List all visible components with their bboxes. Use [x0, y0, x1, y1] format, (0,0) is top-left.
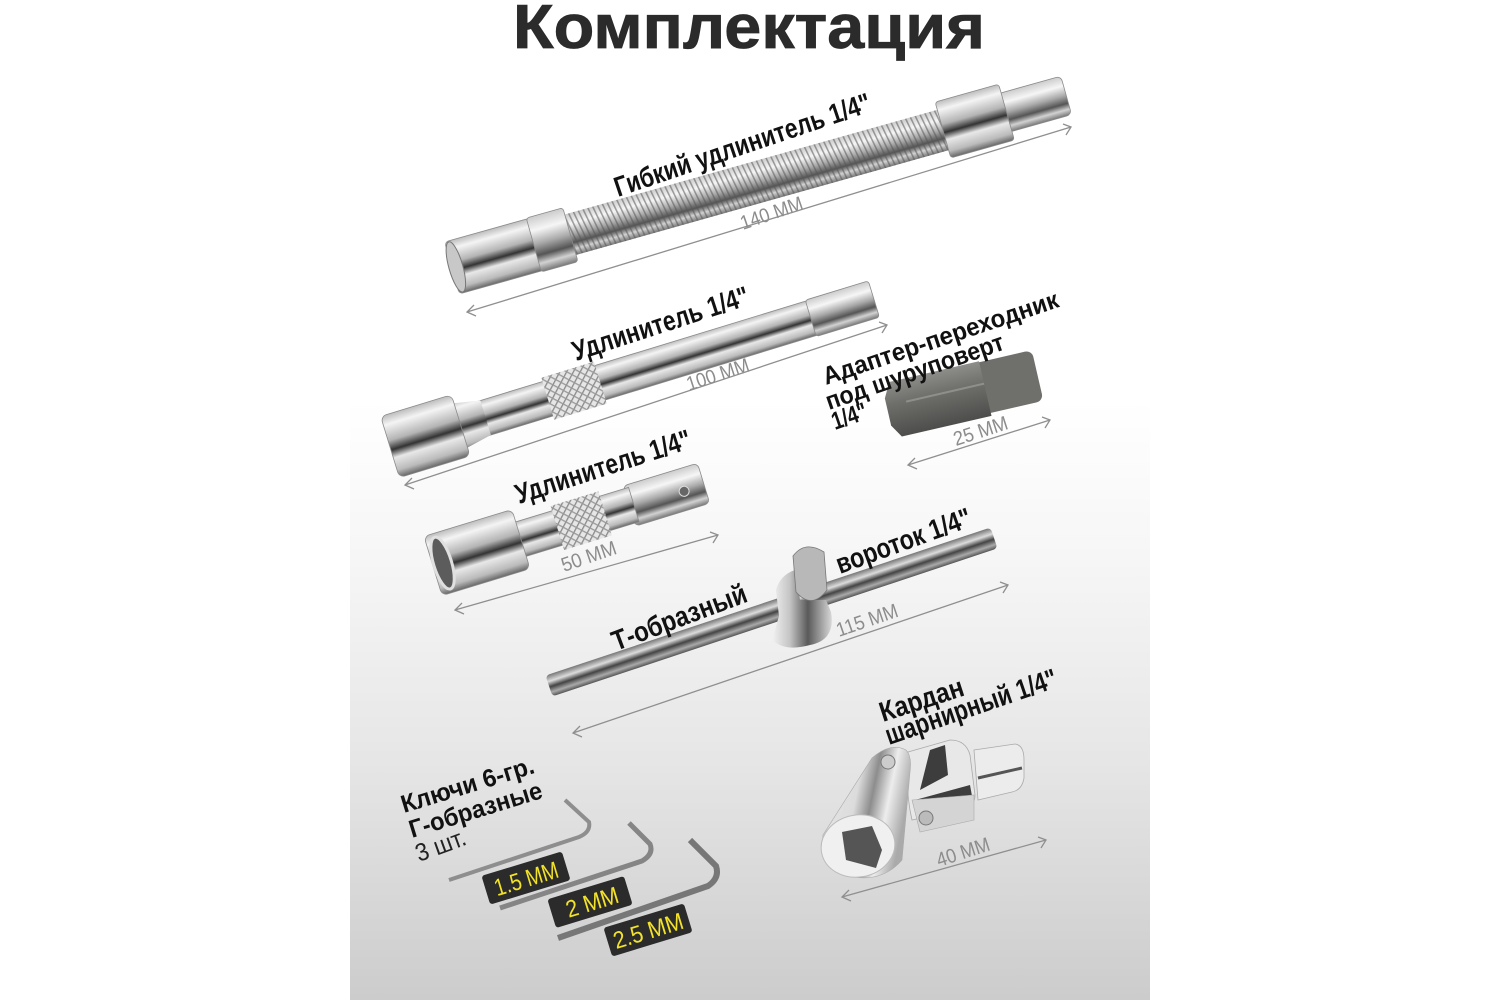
label line 3: 1/4": [828, 397, 871, 436]
socket face: [816, 809, 900, 883]
upper pin: [881, 755, 895, 769]
arrow: 50 mm: [455, 532, 718, 614]
yoke: [907, 740, 975, 820]
label: T-shaped: Т-образный: [607, 578, 751, 657]
item: screwdriver adapter 25 mm: [819, 286, 1063, 469]
arrow: 140 mm: [467, 124, 1071, 316]
dimension: 100 mm: 100 ММ: [684, 355, 752, 396]
tool: universal joint: [816, 740, 1024, 883]
sliding collar: [772, 570, 832, 648]
tool: extension 100 mm: [381, 268, 883, 478]
rod: [546, 528, 997, 696]
label line 1: Кардан: [875, 671, 968, 728]
label line 3: 3 шт.: [411, 824, 470, 868]
dimension: 115 mm: 115 ММ: [833, 600, 901, 642]
yoke shadow: [915, 745, 972, 810]
item: flexible extension 140 mm: [441, 67, 1074, 316]
pin: [919, 811, 933, 825]
label line 2: шарнирный 1/4": [881, 663, 1061, 751]
square socket opening: [842, 826, 882, 868]
size tag 1.5 mm: 1.5 ММ: [491, 857, 562, 902]
label line 2: под шуруповерт: [822, 328, 1008, 416]
label: extension 50 mm: Удлинитель 1/4": [511, 424, 695, 510]
background panel: [350, 200, 1150, 1000]
arrow: 100 mm: [405, 322, 887, 489]
size tag 2 mm: [547, 876, 633, 928]
size tag 2.5 mm: 2.5 ММ: [610, 908, 687, 955]
arrow: 40 mm: [842, 837, 1046, 901]
tool: T-handle: [546, 528, 997, 696]
item: hex keys: [398, 752, 717, 957]
dimension: 25 mm: 25 ММ: [951, 413, 1011, 451]
square drive: [974, 744, 1024, 800]
label line 1: Адаптер-переходник: [819, 286, 1063, 391]
label: adapter: [819, 286, 1063, 436]
socket body: [823, 747, 910, 878]
label line 1: Ключи 6-гр.: [398, 752, 538, 819]
hex key 2 mm: [500, 823, 651, 908]
label: extension 100 mm: Удлинитель 1/4": [568, 280, 753, 367]
size tag 2 mm: 2 ММ: [563, 882, 622, 924]
hex key 1.5 mm: [449, 800, 589, 880]
label: flexible extension: Гибкий удлинитель 1/4": [610, 87, 875, 203]
label line 2: Г-образные: [406, 777, 546, 844]
label: universal joint: [875, 663, 1061, 751]
label: handle: вороток 1/4": [831, 502, 975, 580]
tool: extension 50 mm: [424, 454, 713, 596]
dimension: 140 mm: 140 ММ: [737, 193, 806, 235]
tool: adapter bit: [881, 349, 1044, 438]
tool: flexible extension: [441, 67, 1074, 297]
item: universal joint 40 mm: [816, 663, 1061, 901]
label: hex keys: [398, 752, 546, 868]
arrow: 115 mm: [573, 582, 1008, 737]
item: extension 50 mm: [424, 424, 718, 614]
drive shadow: [978, 768, 1022, 778]
lower lug: [912, 795, 974, 832]
arrow: 25 mm: [908, 417, 1050, 469]
dimension: 50 mm: 50 ММ: [558, 537, 620, 577]
item: T-handle 115 mm: [546, 502, 1008, 737]
dimension: 40 mm: 40 ММ: [934, 834, 993, 872]
square drive: [793, 547, 827, 601]
hex key 2.5 mm: [558, 840, 717, 938]
item: extension 100 mm: [381, 268, 887, 489]
